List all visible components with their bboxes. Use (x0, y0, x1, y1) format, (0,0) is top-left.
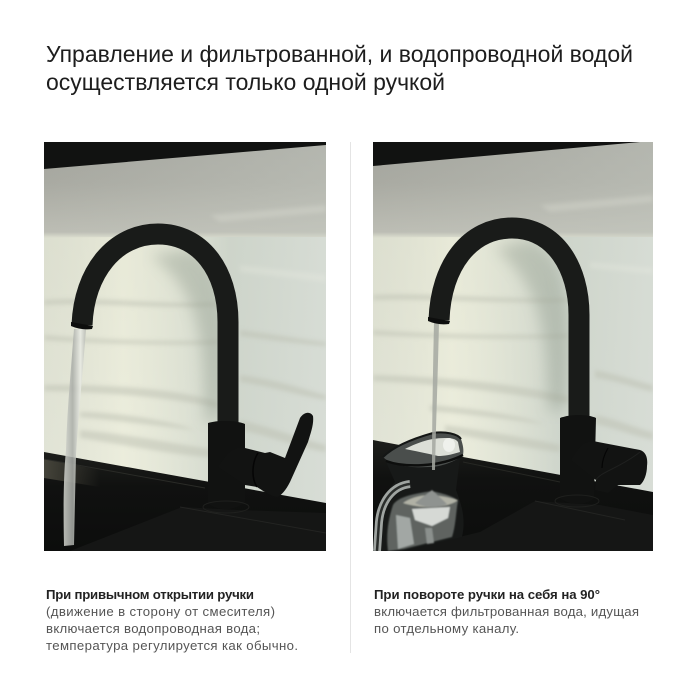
faucet (428, 228, 647, 507)
panel: left photo, tap water (44, 142, 326, 551)
faucet base cylinder (208, 421, 245, 488)
shelf: black upper edge (44, 142, 326, 169)
wall tiles (373, 142, 653, 492)
text block: left caption: (движение в сторону от смесителя) (46, 604, 275, 619)
faucet spout tube (439, 228, 579, 425)
sink: black surface (44, 452, 326, 551)
text block: left caption (46, 587, 298, 653)
sink: black surface (373, 440, 653, 551)
jug handle (377, 484, 410, 551)
shelf: black upper edge (373, 142, 640, 166)
glass jug (374, 432, 464, 551)
faucet (71, 234, 313, 513)
panel divider (350, 142, 351, 653)
jug body (381, 481, 464, 551)
text block: right caption: При повороте ручки на себя на 90° (374, 587, 600, 602)
title: Управление и фильтрованной, и водопроводной водой (46, 41, 633, 67)
text block: right caption: включается фильтрованная вода, идущая (374, 604, 639, 619)
water stream (432, 322, 439, 470)
jug water (387, 490, 458, 551)
faucet spout tube (82, 234, 228, 430)
panel: right photo, filtered water (373, 142, 653, 551)
title: осуществляется только одной ручкой (46, 69, 445, 95)
faucet base cylinder (560, 415, 596, 482)
text block: left caption: температура регулируется как обычно. (46, 638, 298, 653)
jug rim (383, 432, 463, 467)
faucet handle (594, 442, 648, 486)
water stream (64, 329, 86, 546)
title (46, 41, 633, 95)
text block: left caption: При привычном открытии ручки (46, 587, 254, 602)
faucet handle lever (245, 412, 314, 495)
text block: left caption: включается водопроводная вода; (46, 621, 260, 636)
text block: right caption: по отдельному каналу. (374, 621, 519, 636)
wall tiles (44, 145, 326, 503)
text block: right caption (374, 587, 639, 636)
